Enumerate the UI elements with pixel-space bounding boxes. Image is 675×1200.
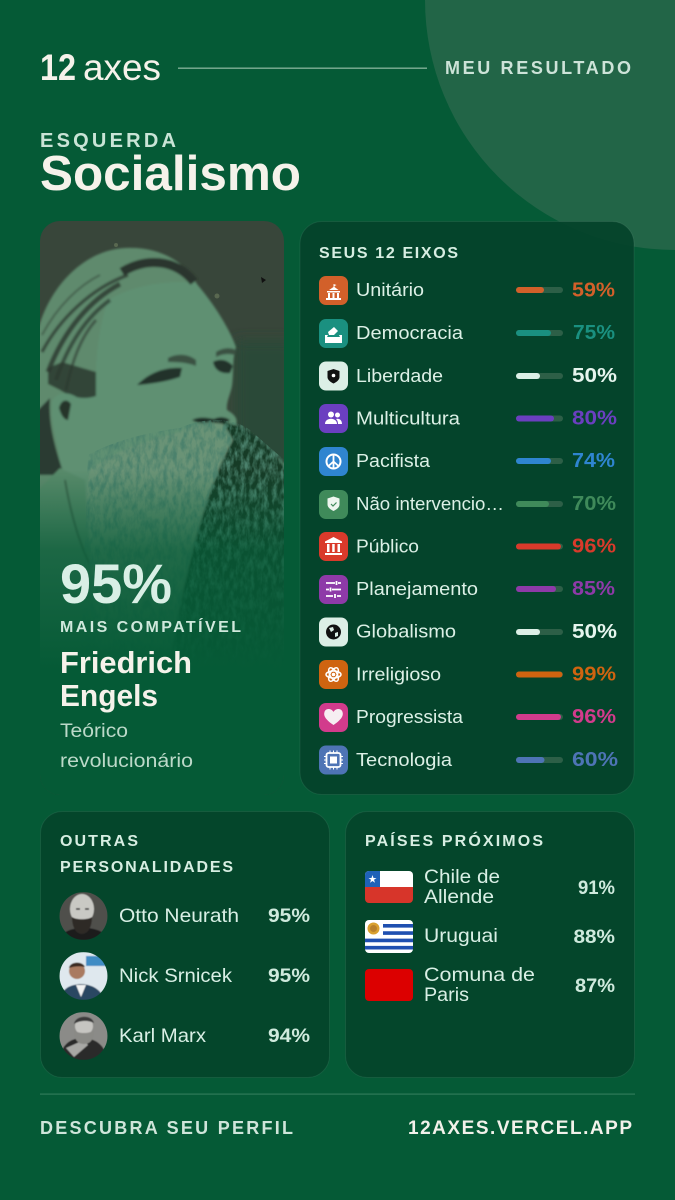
person: Otto Neurath: 95%: [268, 906, 310, 927]
axis row: Progressista: [319, 703, 616, 732]
axis row: Democracia: Democracia: [356, 323, 464, 343]
axis row: Globalismo: Globalismo: [356, 622, 456, 642]
axis row: Pacifista: [319, 447, 615, 476]
axis row: Multicultura: [319, 404, 617, 433]
beard dark: [181, 422, 284, 630]
axis row: Democracia: [319, 319, 615, 348]
header label: MEU RESULTADO: [445, 58, 631, 78]
country: Chile de Allende: 91%: [578, 878, 615, 899]
person: Karl Marx: 94%: [268, 1026, 310, 1047]
panel heading: PAÍSES PRÓXIMOS: [365, 831, 543, 850]
axis row: Planejamento: [319, 575, 615, 604]
person: Nick Srnicek: [59, 952, 310, 1000]
axis row: Progressista: 96%: [572, 706, 616, 728]
axis row: Planejamento: Planejamento: [356, 579, 478, 599]
panel heading: PERSONALIDADES: [60, 859, 233, 876]
axis row: Não intervencionismo: 70%: [572, 493, 616, 515]
title: Socialismo: [40, 147, 301, 201]
country: Comuna de Paris: Comuna de: [424, 964, 535, 986]
logo: 12: [40, 47, 76, 88]
person: Otto Neurath: Otto Neurath: [119, 905, 239, 927]
country: Chile de Allende: [365, 869, 614, 903]
coat: [40, 467, 87, 619]
logo: axes: [83, 47, 161, 88]
axis row: Tecnologia: [319, 746, 618, 774]
decorative corner circle: [425, 0, 675, 250]
axis row: Público: Público: [356, 536, 419, 556]
ear: [66, 392, 76, 398]
figure name: Friedrich: [60, 645, 192, 680]
title: ESQUERDA: [40, 130, 176, 152]
figure name: [60, 645, 192, 713]
match label: MAIS COMPATÍVEL: [60, 617, 241, 636]
axis row: Unitário: [319, 276, 615, 305]
panel heading: OUTRAS: [60, 833, 138, 850]
header: [40, 47, 631, 88]
figure description: revolucionário: [60, 751, 193, 772]
axis row: Liberdade: Liberdade: [356, 366, 443, 386]
portrait: Friedrich Engels: [38, 221, 295, 799]
axis row: Público: [319, 532, 616, 561]
country: Comuna de Paris: [365, 964, 615, 1006]
axis row: Liberdade: 50%: [572, 365, 617, 387]
panel heading: SEUS 12 EIXOS: [319, 245, 458, 262]
country: Uruguai: 88%: [574, 927, 615, 948]
logo: [40, 47, 161, 88]
axis row: Globalismo: 50%: [572, 621, 617, 643]
axis row: Multicultura: Multicultura: [356, 408, 461, 428]
person: Karl Marx: [59, 1012, 310, 1060]
figure description: Teórico: [60, 721, 128, 742]
person: Karl Marx: Karl Marx: [119, 1025, 206, 1047]
person: Nick Srnicek: Nick Srnicek: [119, 965, 232, 987]
eyes: [137, 368, 182, 385]
axis row: Progressista: Progressista: [356, 707, 464, 727]
panel: 12 axes: [300, 222, 634, 794]
axis row: Não intervencionismo: [319, 490, 616, 519]
country: Chile de Allende: Allende: [424, 886, 494, 908]
country: Uruguai: [365, 920, 615, 953]
axis row: Irreligioso: [319, 660, 616, 689]
match percentage: 95%: [60, 552, 172, 615]
axis row: Globalismo: [319, 618, 617, 646]
axis row: Irreligioso: Irreligioso: [356, 664, 441, 684]
face: [140, 284, 284, 467]
country: Uruguai: Uruguai: [424, 925, 498, 947]
axis row: Público: 96%: [572, 536, 616, 558]
person: Otto Neurath: [59, 892, 310, 940]
person: Nick Srnicek: 95%: [268, 966, 310, 987]
panel: other personalities: [40, 812, 330, 1078]
figure name: Engels: [60, 678, 158, 713]
panel heading: [60, 833, 233, 876]
footer url: 12AXES.VERCEL.APP: [408, 1118, 632, 1139]
axis row: Pacifista: 74%: [572, 450, 615, 472]
axis row: Planejamento: 85%: [572, 578, 615, 600]
footer call to action: DESCUBRA SEU PERFIL: [40, 1118, 293, 1138]
figure description: [60, 721, 193, 772]
panel: nearby countries: [346, 812, 634, 1078]
axis row: Pacifista: Pacifista: [356, 451, 431, 471]
country: Chile de Allende: Chile de: [424, 866, 500, 888]
hair strands: [42, 263, 194, 390]
country: Comuna de Paris: Paris: [424, 984, 469, 1006]
footer: [40, 1094, 635, 1139]
hair mass: [38, 248, 197, 500]
axis row: Irreligioso: 99%: [572, 664, 616, 686]
axis row: Multicultura: 80%: [572, 408, 617, 430]
beard light: [87, 421, 232, 500]
panel: most compatible figure: [38, 221, 295, 799]
axis row: Tecnologia: Tecnologia: [356, 750, 453, 770]
axis row: Não intervencionismo: Não intervencio…: [356, 494, 504, 514]
country: Comuna de Paris: 87%: [575, 976, 615, 997]
axis row: Tecnologia: 60%: [572, 749, 618, 771]
axis row: Unitário: 59%: [572, 280, 615, 302]
axis row: Democracia: 75%: [573, 322, 615, 344]
axis row: Liberdade: [319, 362, 617, 390]
axis row: Unitário: Unitário: [356, 280, 424, 300]
